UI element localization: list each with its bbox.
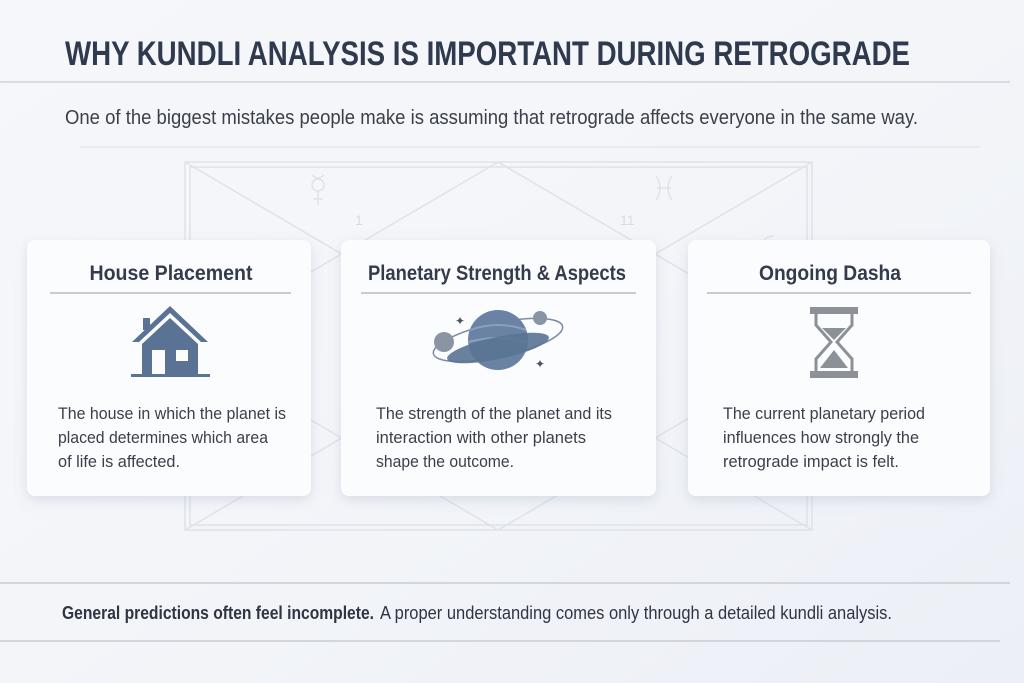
footer conclusion text — [62, 603, 892, 623]
panel: house placement — [27, 240, 311, 496]
background kundli chart — [185, 162, 812, 530]
icon: hourglass — [810, 307, 858, 378]
text: house description: of life is affected. — [58, 453, 180, 471]
text: house description: The house in which the planet is — [58, 405, 286, 423]
text: dasha description: influences how strongly the — [723, 429, 919, 447]
icon: planet — [430, 310, 566, 371]
footer conclusion text: General predictions often feel incomplete. — [62, 603, 374, 623]
text: planetary description: interaction with other planets — [376, 429, 586, 447]
panel: house placement: House Placement — [90, 262, 252, 285]
panel: planetary strength — [341, 240, 656, 496]
text: dasha description: The current planetary period — [723, 405, 925, 423]
icon: planet: ✦ — [455, 314, 465, 328]
text: house description — [58, 405, 286, 471]
text: dasha description — [723, 405, 925, 471]
icon: house — [131, 306, 210, 377]
background kundli chart: 11 — [620, 212, 635, 228]
panel: ongoing dasha: Ongoing Dasha — [759, 262, 901, 285]
icon: planet: ✦ — [535, 357, 545, 371]
text: house description: placed determines which area — [58, 429, 269, 447]
intro text: One of the biggest mistakes people make is assuming that retrograde affects everyone in the same way. — [65, 107, 918, 129]
text: planetary description: The strength of the planet and its — [376, 405, 612, 423]
footer conclusion text: A proper understanding comes only through a detailed kundli analysis. — [380, 603, 892, 623]
text: dasha description: retrograde impact is felt. — [723, 453, 899, 471]
text: planetary description — [376, 405, 612, 471]
background kundli chart: 1 — [355, 212, 363, 228]
panel: ongoing dasha — [688, 240, 990, 496]
text: planetary description: shape the outcome. — [376, 453, 514, 471]
panel: planetary strength: Planetary Strength & Aspects — [368, 262, 626, 285]
